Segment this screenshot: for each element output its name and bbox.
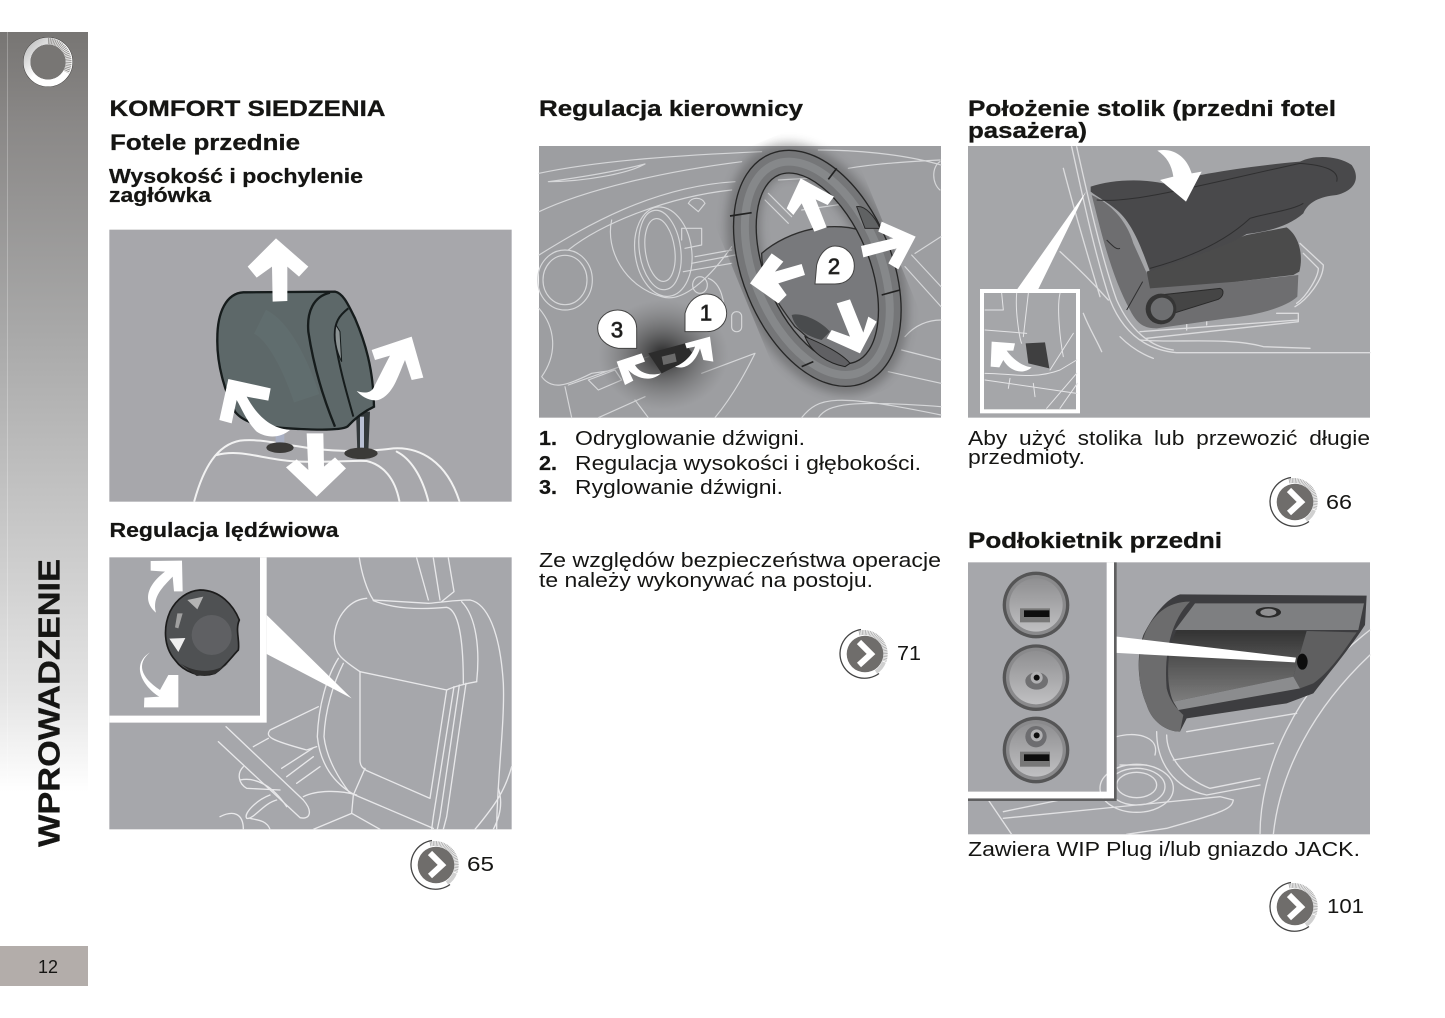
page number tab bbox=[0, 946, 88, 986]
side lever bbox=[1146, 288, 1223, 324]
arrow: down bbox=[286, 433, 346, 497]
reference badge 71 bbox=[839, 629, 921, 679]
lever and small arrows bbox=[617, 337, 713, 385]
reference badge 71: 71 bbox=[897, 643, 921, 665]
seat line art bbox=[218, 558, 512, 829]
panel: headrest illustration bbox=[109, 230, 512, 502]
heading: fotele przednie: Fotele przednie bbox=[110, 130, 300, 155]
tray description: przedmioty. bbox=[968, 447, 1085, 469]
inset frame and pointer bbox=[109, 557, 352, 723]
tray description bbox=[968, 428, 1370, 469]
steps list bbox=[539, 428, 921, 499]
reference badge 101: 101 bbox=[1327, 896, 1364, 918]
socket: USB and jack bbox=[1003, 717, 1069, 783]
seat back folded bbox=[1091, 157, 1356, 272]
vertical section title: WPROWADZENIE bbox=[32, 559, 66, 847]
dashboard line art bbox=[538, 150, 941, 418]
icon: chapter ring bbox=[23, 37, 73, 87]
arrow: tilt forward bbox=[357, 337, 423, 400]
arrow: up bbox=[148, 561, 183, 613]
subheading: headrest bbox=[109, 166, 363, 207]
knob bbox=[165, 590, 239, 676]
steps list: 3. bbox=[539, 477, 557, 499]
callout 1: 1 bbox=[700, 301, 712, 326]
subheading: headrest: zagłówka bbox=[109, 185, 212, 207]
floor line art bbox=[1060, 147, 1370, 358]
safety note bbox=[539, 550, 941, 592]
headrest posts bbox=[266, 412, 378, 459]
callout 2 bbox=[815, 246, 854, 284]
heading: steering: Regulacja kierownicy bbox=[539, 96, 804, 121]
safety note: te należy wykonywać na postoju. bbox=[539, 570, 873, 592]
reference badge 65 bbox=[410, 840, 494, 890]
heading: table position: Położenie stolik (przedni fotel bbox=[968, 96, 1336, 121]
panel: steering wheel illustration bbox=[538, 137, 941, 418]
headrest cushion bbox=[217, 292, 374, 430]
heading: komfort siedzenia: KOMFORT SIEDZENIA bbox=[110, 96, 386, 121]
open armrest box bbox=[1139, 594, 1367, 732]
subheading: lumbar: Regulacja lędźwiowa bbox=[110, 520, 340, 542]
callout 3 bbox=[598, 310, 637, 348]
callout 2: 2 bbox=[828, 254, 840, 279]
heading: table position bbox=[968, 96, 1336, 143]
seat cushion bbox=[1147, 227, 1301, 288]
tray description: Aby użyć stolika lub przewozić długie bbox=[968, 428, 1370, 450]
panel: folding seat illustration bbox=[968, 146, 1370, 418]
inset with tray bbox=[982, 192, 1086, 411]
panel: armrest illustration bbox=[968, 562, 1370, 834]
inset frame and pointer bbox=[968, 562, 1296, 801]
callout 3: 3 bbox=[611, 317, 623, 342]
seat seams bbox=[1097, 163, 1337, 310]
reference badge 66: 66 bbox=[1326, 492, 1352, 514]
reference badge 66 bbox=[1269, 477, 1352, 527]
seat top outline bbox=[194, 440, 459, 501]
arrow: tilt backward bbox=[219, 379, 290, 436]
safety note: Ze względów bezpieczeństwa operacje bbox=[539, 550, 941, 572]
steps list: Ryglowanie dźwigni. bbox=[575, 477, 783, 499]
heading: table position: pasażera) bbox=[968, 118, 1087, 143]
page number tab: 12 bbox=[38, 957, 58, 977]
heading: armrest: Podłokietnik przedni bbox=[968, 528, 1222, 553]
panel: lumbar adjustment illustration bbox=[109, 557, 512, 829]
steering wheel bbox=[716, 140, 919, 396]
seat base bbox=[1092, 195, 1298, 328]
callout 1 bbox=[685, 294, 727, 332]
steps list: 2. bbox=[539, 453, 557, 475]
reference badge 101 bbox=[1269, 882, 1364, 932]
reference badge 65: 65 bbox=[467, 854, 494, 876]
steps list: 1. bbox=[539, 428, 557, 450]
socket: USB bbox=[1003, 572, 1069, 638]
arrow: up bbox=[248, 238, 308, 302]
arrows: wheel bbox=[750, 178, 916, 353]
steps list: Odryglowanie dźwigni. bbox=[575, 428, 805, 450]
wheel halo bbox=[714, 137, 921, 399]
arrow: down bbox=[140, 652, 178, 707]
socket: jack bbox=[1003, 644, 1069, 711]
arrow: fold down bbox=[1157, 150, 1202, 202]
console line art bbox=[988, 630, 1370, 834]
sidebar bbox=[0, 32, 88, 792]
steps list: Regulacja wysokości i głębokości. bbox=[575, 453, 921, 475]
subheading: headrest: Wysokość i pochylenie bbox=[109, 166, 363, 188]
armrest description: Zawiera WIP Plug i/lub gniazdo JACK. bbox=[968, 839, 1360, 861]
shadow behind lever bbox=[598, 300, 728, 410]
